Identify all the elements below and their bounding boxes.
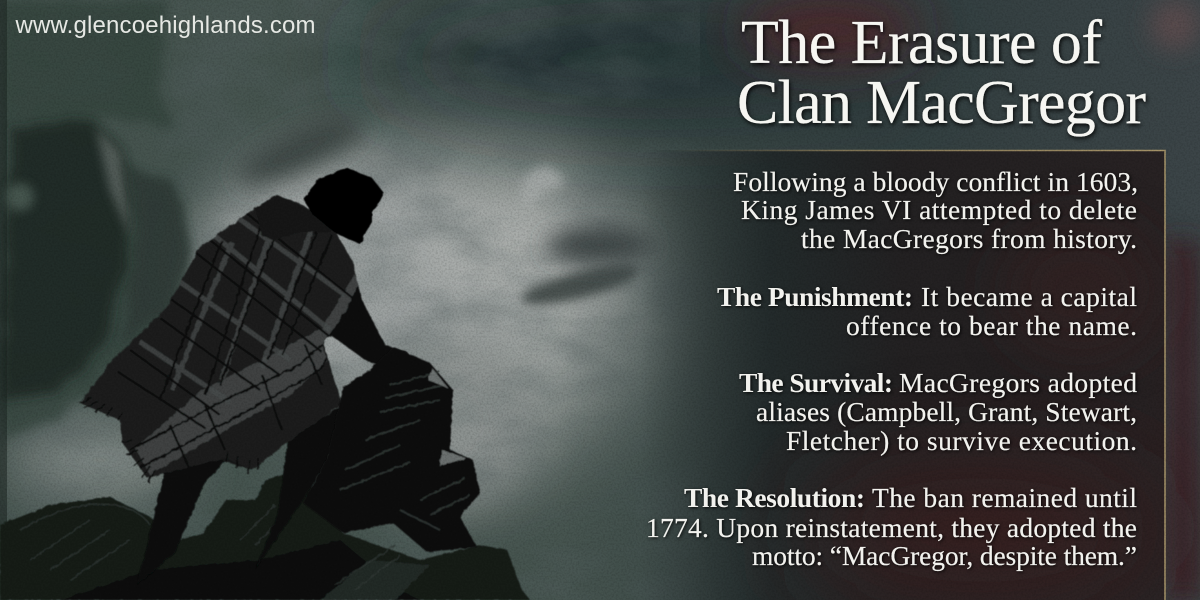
intro paragraph: the MacGregors from history. (801, 223, 1137, 254)
paragraph: the survival (739, 367, 1137, 456)
moon behind clouds (521, 166, 566, 210)
boulder under hand (303, 347, 480, 552)
title (737, 9, 1146, 137)
title: Clan MacGregor (737, 69, 1146, 137)
intro paragraph: Following a bloody conflict in 1603, (733, 166, 1138, 197)
text panel (640, 150, 1165, 600)
title: The Erasure of (741, 9, 1102, 77)
drifting cloud texture (0, 0, 700, 600)
paragraph: the resolution: 1774. Upon reinstatement, they adopted the (646, 512, 1137, 543)
paragraph: the survival: aliases (Campbell, Grant, Stewart, (756, 396, 1137, 427)
paragraph: the resolution: The Resolution: (684, 482, 865, 513)
paragraph: the punishment: offence to bear the name. (846, 310, 1137, 341)
figure: kilt (170, 340, 342, 470)
figure: tartan cloak (80, 195, 362, 478)
paragraph: the survival: Fletcher) to survive execution. (786, 425, 1137, 456)
paragraph: the resolution (646, 482, 1137, 571)
paragraph: the punishment: The Punishment: (717, 281, 913, 312)
figure: cloak fringe (80, 398, 258, 482)
paragraph: the survival: MacGregors adopted (899, 367, 1137, 398)
paragraph: the resolution: motto: “MacGregor, despite them.” (752, 540, 1137, 571)
figure: man in tartan cloak (80, 168, 414, 585)
figure: head (303, 168, 384, 244)
ground and rocks (0, 470, 530, 600)
paragraph: the resolution: The ban remained until (872, 482, 1137, 513)
figure: arm (318, 262, 414, 372)
figure: hood (255, 195, 332, 240)
figure: legs (137, 405, 342, 585)
paragraph: the survival: The Survival: (739, 367, 893, 398)
intro paragraph: King James VI attempted to delete (741, 194, 1137, 225)
intro paragraph (733, 166, 1138, 254)
paragraph: the punishment (717, 281, 1137, 341)
paragraph: the punishment: It became a capital (921, 281, 1137, 312)
right side wash (560, 0, 1200, 600)
website url: www.glencoehighlands.com (14, 12, 316, 39)
left cliff (0, 0, 192, 600)
